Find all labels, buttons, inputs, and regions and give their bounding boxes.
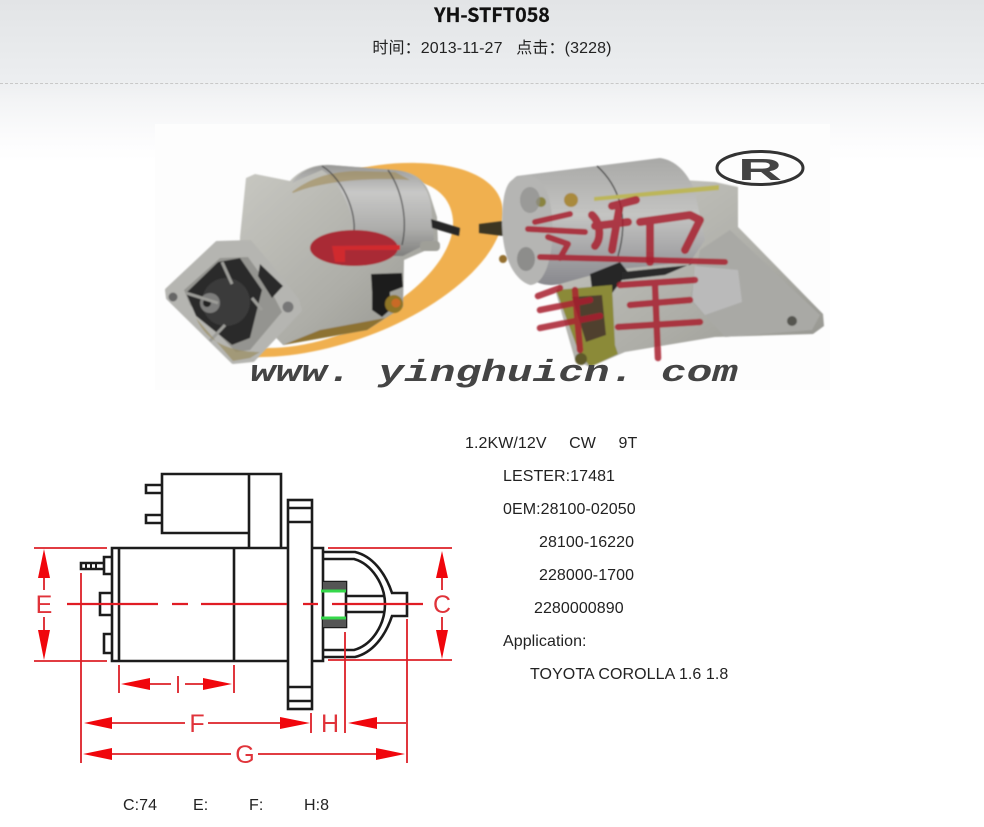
dimension values: C:74 [123,797,157,814]
starter dimension diagram [34,474,452,769]
OEM number 3: 228000-1700 [539,567,634,584]
dimension letters: E [36,591,52,619]
output stud [479,221,503,236]
OEM number 1: 0EM:28100-02050 [503,501,636,518]
dimension letters: C [433,591,451,619]
dimension letters: G [235,741,255,769]
red calligraphy watermark [528,200,725,358]
dimension values: H:8 [304,797,329,814]
dimension letters: F [189,710,205,738]
solenoid terminal bracket [556,285,618,367]
publish date and click count: 时间：2013-11-27 点击：(3228) [372,40,612,57]
OEM number 4: 2280000890 [534,600,624,617]
application heading: Application: [503,633,587,650]
solenoid [162,474,281,548]
R trademark mark [717,152,803,187]
mounting flange [288,500,312,709]
red oval [310,230,398,266]
R trademark mark: R [738,152,782,187]
red arrowheads [38,549,448,760]
motor housing [112,548,287,661]
application vehicle: TOYOTA COROLLA 1.6 1.8 [530,666,728,683]
left starter motor [167,165,460,362]
red dimension lines [34,548,452,763]
front flange [167,242,300,362]
Lester number: LESTER:17481 [503,468,615,485]
dimension letters: H [321,710,339,738]
pinion and shaft [323,582,385,627]
product photo [155,124,830,391]
website address: www. yinghuicn. com [250,356,739,391]
icon: orange crescent logo [255,163,503,357]
black wire clip [590,262,628,296]
terminal connector [371,273,403,317]
center line [67,603,423,605]
dimension letters [36,591,451,769]
rear stud [431,219,460,236]
OEM number 2: 28100-16220 [539,534,634,551]
dimension values: F: [249,797,263,814]
specification text [465,435,728,683]
gold rod [594,185,719,201]
dimension values: E: [193,797,208,814]
rear terminals [81,557,112,653]
right starter motor [479,158,824,367]
power, rotation, teeth: 1.2KW/12V CW 9T [465,435,637,452]
nose housing [312,548,323,661]
dimension values [123,797,329,814]
